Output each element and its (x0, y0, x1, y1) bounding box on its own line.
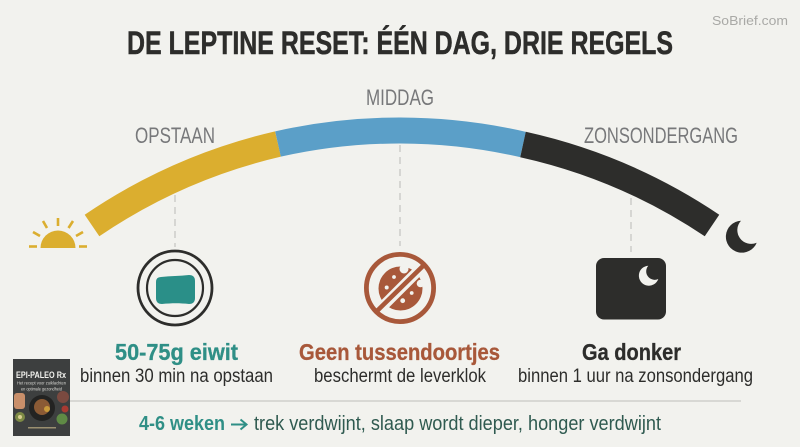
icon: sunrise (29, 218, 87, 248)
icon: plate with protein (138, 251, 212, 325)
rule 1 heading: 50-75g eiwit (115, 339, 238, 365)
book cover: en optimale gezondheid (21, 386, 62, 392)
day arc timeline (92, 131, 712, 226)
book cover (13, 359, 70, 436)
label: zonsondergang: ZONSONDERGANG (584, 123, 738, 148)
connector: morning (174, 195, 176, 247)
connector: noon (399, 145, 401, 246)
label: middag: MIDDAG (366, 85, 434, 110)
arrow (231, 420, 246, 430)
result line: trek verdwijnt, slaap wordt dieper, honger verdwijnt (254, 413, 661, 435)
rule 2 detail: beschermt de leverklok (314, 366, 486, 387)
rule 1 detail: binnen 30 min na opstaan (80, 366, 273, 387)
book cover: Het recept voor zuiklachten (17, 380, 66, 386)
result line: 4-6 weken (139, 413, 225, 435)
book cover: EPI-PALEO Rx (16, 370, 67, 381)
connector: sunset (630, 198, 632, 252)
rule 2 heading: Geen tussendoortjes (299, 339, 500, 365)
watermark: SoBrief.com (712, 13, 788, 28)
rule 3 heading: Ga donker (582, 339, 681, 365)
label: opstaan: OPSTAAN (135, 123, 215, 148)
divider (70, 400, 741, 402)
rule 3 detail: binnen 1 uur na zonsondergang (518, 366, 753, 387)
icon: dark window (596, 258, 666, 320)
icon: no snacks (366, 254, 434, 322)
icon: moon (726, 221, 757, 253)
